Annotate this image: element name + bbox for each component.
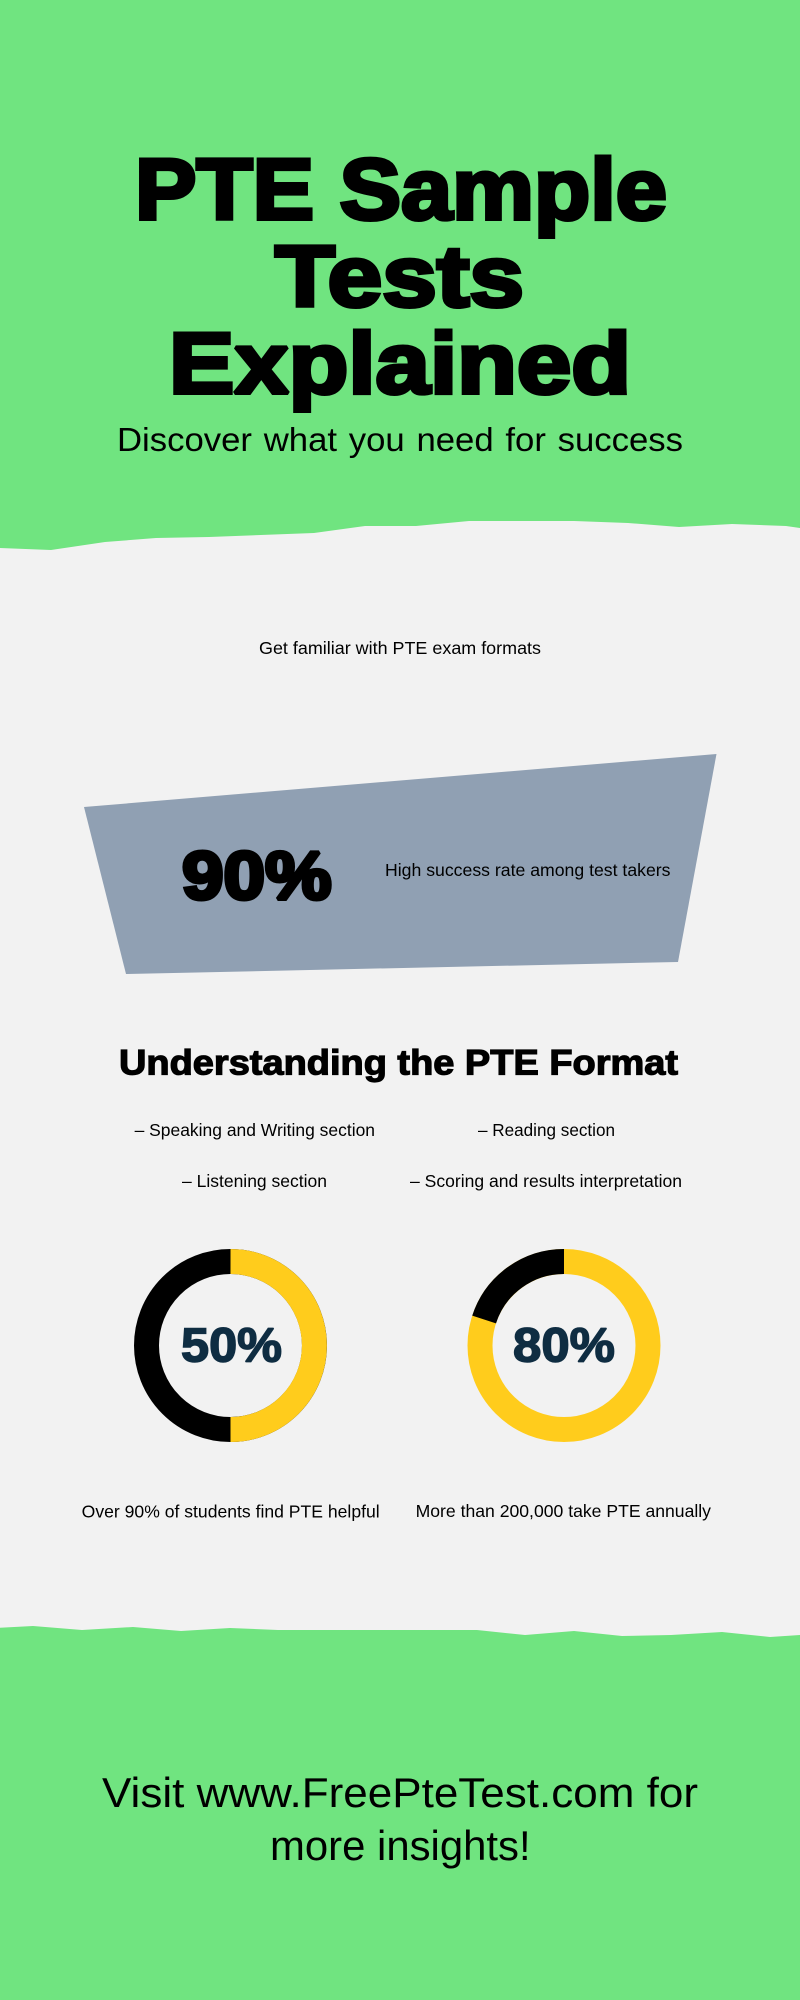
title: Explained [169,316,631,412]
section heading: Understanding the PTE Format [119,1044,678,1082]
donut chart: 80%: 80% [513,1320,615,1372]
caption: 50% chart: Over 90% of students find PTE helpful [82,1502,380,1522]
title: Tests [275,229,524,325]
intro text: Get familiar with PTE exam formats [259,638,541,658]
footer panel: torn green banner [0,1626,800,2000]
footer call to action: Visit www.FreePteTest.com for [102,1769,698,1816]
format list: – Scoring and results interpretation [410,1171,682,1191]
stat description: High success rate among test takers [385,860,671,880]
stat background shape [84,754,716,974]
caption: 80% chart: More than 200,000 take PTE annually [416,1501,711,1521]
footer call to action: more insights! [270,1822,531,1869]
donut chart: 50% [146,1262,314,1430]
format list [135,1120,682,1191]
panel: 90% success stat [84,754,716,974]
header panel: torn green banner [0,0,800,550]
format list: – Listening section [182,1171,327,1191]
stat number: 90% [182,838,332,914]
donut chart: 80% [480,1262,648,1430]
title [135,142,667,412]
donut chart: 50%: 50% [181,1320,282,1372]
subtitle: Discover what you need for success [117,421,683,458]
footer call to action [102,1769,698,1869]
format list: – Speaking and Writing section [135,1120,375,1140]
format list: – Reading section [478,1120,615,1140]
title: PTE Sample [135,142,667,238]
